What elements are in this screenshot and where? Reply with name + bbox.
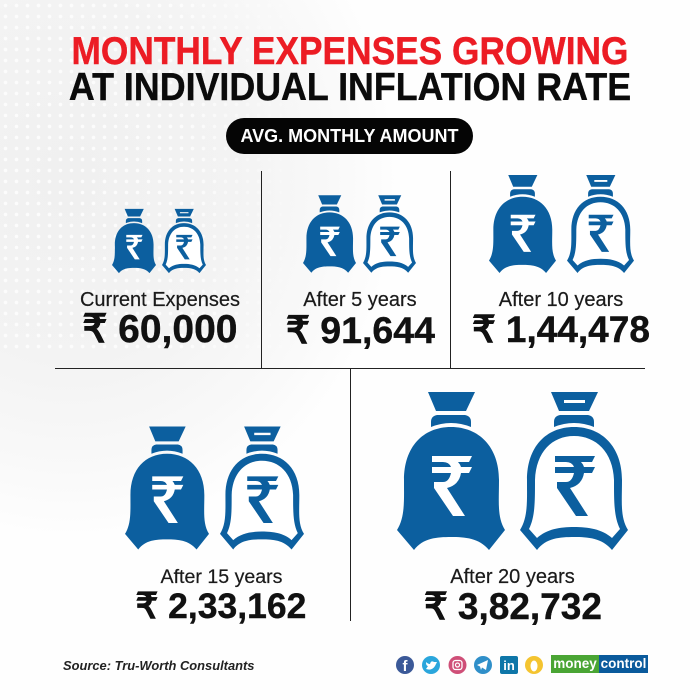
amount: ₹ 3,82,732 (424, 586, 602, 627)
panel: after 5 years (286, 195, 435, 351)
panel: after 20 years (397, 392, 628, 627)
icon: money bags (125, 426, 304, 550)
subtitle pill: AVG. MONTHLY AMOUNT (240, 126, 458, 146)
logo: moneycontrol: money (553, 656, 597, 671)
panel: after 10 years (472, 175, 650, 350)
label: After 15 years (161, 566, 282, 588)
icon: money bags (489, 175, 634, 273)
panel: current expenses (80, 208, 240, 351)
amount: ₹ 91,644 (286, 309, 435, 351)
icon: linkedin (500, 656, 518, 674)
label: After 5 years (303, 289, 417, 311)
label: After 10 years (499, 289, 623, 311)
icon: facebook (396, 656, 414, 675)
icon: linkedin: in (503, 658, 515, 673)
icon: facebook: f (402, 658, 408, 675)
source: Source: Tru-Worth Consultants (63, 658, 254, 673)
icon: money bags (397, 392, 628, 550)
amount: ₹ 2,33,162 (136, 586, 306, 626)
icon: twitter (422, 656, 440, 674)
title: MONTHLY EXPENSES GROWING (71, 30, 628, 73)
social icons (396, 656, 543, 675)
logo: moneycontrol (551, 655, 648, 673)
label: Current Expenses (80, 289, 240, 311)
logo: moneycontrol: control (601, 656, 646, 671)
subtitle pill (226, 118, 473, 154)
amount: ₹ 60,000 (83, 308, 237, 351)
icon: instagram (448, 656, 466, 674)
icon: money bags (112, 208, 206, 274)
title (68, 30, 631, 109)
amount: ₹ 1,44,478 (472, 309, 650, 350)
label: After 20 years (450, 566, 575, 588)
icon: money bags (303, 195, 416, 273)
title: AT INDIVIDUAL INFLATION RATE (68, 66, 631, 109)
panel: after 15 years (125, 426, 306, 626)
icon: koo (525, 656, 543, 674)
icon: telegram (474, 656, 492, 674)
